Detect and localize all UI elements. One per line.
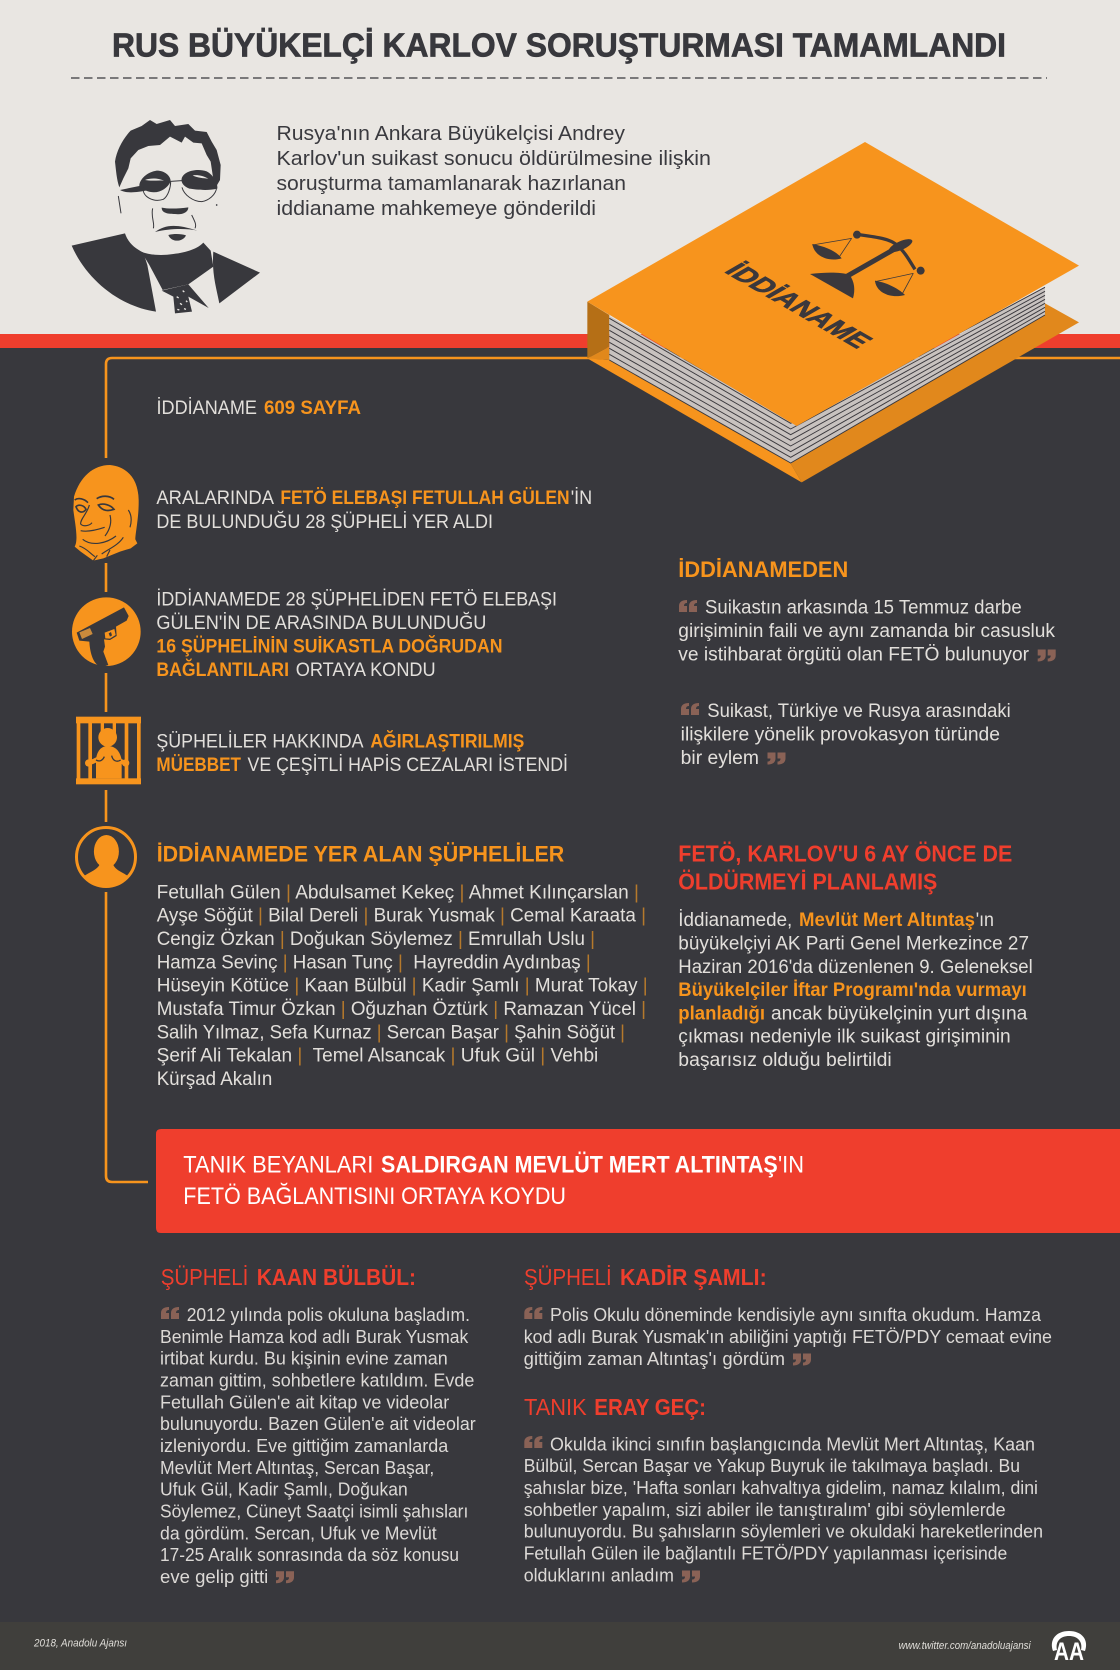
heading: suspect Kadir Şamlı: ŞÜPHELİ — [524, 1264, 612, 1290]
banner: witness statements: SALDIRGAN MEVLÜT MERT ALTINTAŞ — [381, 1152, 778, 1179]
text block: first assassination attempt: çıkması nedeniyle ilk suikast girişiminin — [678, 1027, 1011, 1048]
book cover title: İDDİANAME — [718, 259, 879, 352]
text: 16 suspects directly connected: ORTAYA KONDU — [296, 660, 436, 681]
list of suspects: Kürşad Akalın — [157, 1069, 272, 1090]
quote: Kaan Bülbül statement: zaman gittim, sohbetlere katıldım. Evde — [160, 1370, 474, 1390]
heading: from the indictment: İDDİANAMEDEN — [678, 557, 848, 582]
icon: gun in circle — [72, 597, 141, 667]
list of suspects: Salih Yılmaz, Sefa Kurnaz | Sercan Başar | Şahin Söğüt | — [157, 1022, 625, 1043]
quote: Kadir Şamlı statement: gittiğim zaman Altıntaş'ı gördüm — [524, 1349, 785, 1369]
intro text: Rusya'nın Ankara Büyükelçisi Andrey — [276, 123, 625, 145]
quote: FETÖ behind the assassination — [678, 598, 1056, 665]
heading: suspects in the indictment: İDDİANAMEDE YER ALAN ŞÜPHELİLER — [157, 842, 564, 867]
quote: Kaan Bülbül statement: bulunuyordu. Bazen Gülen'e ait videolar — [160, 1414, 476, 1434]
heading: planned 6 months earlier: ÖLDÜRMEYİ PLANLAMIŞ — [678, 869, 937, 895]
quote: Kadir Şamlı statement — [524, 1305, 1052, 1369]
quote: Kaan Bülbül statement: 2012 yılında polis okuluna başladım. — [187, 1305, 470, 1325]
quote: Eray Geç statement: sohbetler yapalım, sizi abiler ile tanıştıralım' gibi söylemlerde — [524, 1500, 1006, 1520]
text block: first assassination attempt: başarısız olduğu belirtildi — [678, 1050, 892, 1071]
text block: first assassination attempt: İddianamede, — [678, 910, 792, 931]
intro text: Karlov'un suikast sonucu öldürülmesine ilişkin — [276, 148, 711, 170]
quote: FETÖ behind the assassination: ve istihbarat örgütü olan FETÖ bulunuyor — [678, 644, 1030, 665]
text: Gülen among suspects: ARALARINDA — [156, 488, 274, 509]
quote: Kaan Bülbül statement: Benimle Hamza kod adlı Burak Yusmak — [160, 1327, 469, 1347]
intro text: iddianame mahkemeye gönderildi — [276, 198, 596, 220]
heading: witness Eray Geç — [524, 1394, 706, 1420]
text block: first assassination attempt: planladığı — [678, 1004, 765, 1024]
quote: Eray Geç statement: Fetullah Gülen ile bağlantılı FETÖ/PDY yapılanması içerisinde — [524, 1544, 1007, 1564]
text: 16 suspects directly connected — [156, 590, 557, 681]
quote: Eray Geç statement: Okulda ikinci sınıfın başlangıcında Mevlüt Mert Altıntaş, Kaan — [550, 1434, 1035, 1454]
book illustration: İDDİANAME — [587, 142, 1079, 482]
quote: Eray Geç statement — [524, 1434, 1043, 1585]
text: requested sentences: AĞIRLAŞTIRILMIŞ — [370, 730, 524, 752]
logo: AA — [1052, 1631, 1086, 1666]
icon: person silhouette — [76, 828, 136, 887]
heading: planned 6 months earlier — [678, 841, 1012, 895]
heading: suspect Kadir Şamlı — [524, 1264, 767, 1290]
quote: provocation: bir eylem — [681, 748, 759, 769]
quote: Kaan Bülbül statement — [160, 1305, 476, 1587]
quote: provocation: Suikast, Türkiye ve Rusya arasındaki — [707, 701, 1011, 722]
text: 16 suspects directly connected: GÜLEN'İN DE ARASINDA BULUNDUĞU — [156, 612, 486, 634]
timeline connector line — [106, 358, 1120, 1182]
quote: provocation — [681, 701, 1011, 769]
heading: witness Eray Geç: TANIK — [524, 1394, 587, 1420]
quote: Eray Geç statement: bulunuyordu. Bu şahısların söylemleri ve okuldaki hareketlerinden — [524, 1522, 1043, 1542]
text block: first assassination attempt: Mevlüt Mert Altıntaş — [799, 910, 975, 931]
text: 16 suspects directly connected: BAĞLANTILARI — [156, 659, 289, 681]
text block: first assassination attempt: büyükelçiyi AK Parti Genel Merkezince 27 — [678, 934, 1029, 955]
quote: Kadir Şamlı statement: Polis Okulu döneminde kendisiyle aynı sınıfta okudum. Hamza — [550, 1305, 1042, 1325]
quote: Kaan Bülbül statement: Mevlüt Mert Altıntaş, Sercan Başar, — [160, 1458, 434, 1478]
text: page count: İDDİANAME — [156, 398, 257, 419]
text: requested sentences: VE ÇEŞİTLİ HAPİS CEZALARI İSTENDİ — [248, 755, 568, 776]
text: Gülen among suspects: FETÖ ELEBAŞI FETULLAH GÜLEN — [280, 488, 570, 509]
heading: suspect Kaan Bülbül — [161, 1264, 416, 1290]
intro text — [276, 123, 711, 220]
title: RUS BÜYÜKELÇİ KARLOV SORUŞTURMASI TAMAMLANDI — [112, 28, 1006, 64]
list of suspects: Mustafa Timur Özkan | Oğuzhan Öztürk | Ramazan Yücel | — [157, 999, 646, 1020]
text: 16 suspects directly connected: İDDİANAMEDE 28 ŞÜPHELİDEN FETÖ ELEBAŞI — [156, 590, 557, 611]
text block: first assassination attempt — [678, 910, 1033, 1071]
list of suspects: Ayşe Söğüt | Bilal Dereli | Burak Yusmak | Cemal Karaata | — [157, 906, 646, 927]
list of suspects: Hüseyin Kötüce | Kaan Bülbül | Kadir Şamlı | Murat Tokay | — [157, 976, 648, 997]
quote: Kaan Bülbül statement: Fetullah Gülen'e ait kitap ve videolar — [160, 1392, 449, 1412]
text: requested sentences — [156, 730, 568, 776]
quote: Kaan Bülbül statement: Ufuk Gül, Kadir Şamlı, Doğukan — [160, 1480, 408, 1500]
text: Gülen among suspects: DE BULUNDUĞU 28 ŞÜPHELİ YER ALDI — [156, 511, 493, 533]
heading: suspect Kadir Şamlı: KADİR ŞAMLI: — [620, 1264, 767, 1290]
quote: Eray Geç statement: şahıslar bize, 'Hafta sonları kahvaltıya gidelim, namaz kılalım, dini — [524, 1478, 1038, 1498]
footer link: www.twitter.com/anadoluajansi — [899, 1640, 1031, 1652]
icon: Fetullah Gülen face — [73, 465, 139, 561]
text: requested sentences: MÜEBBET — [156, 755, 241, 776]
list of suspects — [157, 882, 648, 1090]
quote: Kaan Bülbül statement: izleniyordu. Eve gittiğim zamanlarda — [160, 1436, 449, 1456]
quote: Kaan Bülbül statement: eve gelip gitti — [160, 1567, 268, 1587]
icon: scales of justice — [810, 231, 925, 298]
heading: witness Eray Geç: ERAY GEÇ: — [594, 1394, 706, 1420]
text block: first assassination attempt: Haziran 2016'da düzenlenen 9. Geleneksel — [678, 957, 1033, 978]
intro text: soruşturma tamamlanarak hazırlanan — [276, 173, 626, 195]
list of suspects: Şerif Ali Tekalan | Temel Alsancak | Ufuk Gül | Vehbi — [157, 1046, 598, 1067]
quote: provocation: ilişkilere yönelik provokasyon türünde — [681, 725, 1000, 746]
text: 16 suspects directly connected: 16 ŞÜPHELİNİN SUİKASTLA DOĞRUDAN — [156, 636, 502, 658]
quote: FETÖ behind the assassination: Suikastın arkasında 15 Temmuz darbe — [705, 598, 1022, 619]
quote: Kaan Bülbül statement: 17-25 Aralık sonrasında da söz konusu — [160, 1545, 459, 1565]
banner: witness statements — [156, 1129, 1120, 1233]
heading: suspect Kaan Bülbül: ŞÜPHELİ — [161, 1264, 248, 1290]
logo: AA: AA — [1054, 1638, 1084, 1666]
text block: first assassination attempt: Büyükelçiler İftar Programı'nda vurmayı — [678, 980, 1027, 1001]
banner: witness statements: 'IN — [778, 1152, 804, 1179]
text: Gülen among suspects: 'İN — [571, 488, 592, 509]
text: page count — [156, 398, 361, 419]
quote: Eray Geç statement: olduklarını anladım — [524, 1565, 674, 1585]
quote: FETÖ behind the assassination: girişiminin faili ve aynı zamanda bir casusluk — [678, 621, 1055, 642]
text block: first assassination attempt: 'ın — [976, 910, 994, 931]
heading: suspect Kaan Bülbül: KAAN BÜLBÜL: — [257, 1264, 416, 1290]
footer credit: 2018, Anadolu Ajansı — [33, 1638, 127, 1650]
text: requested sentences: ŞÜPHELİLER HAKKINDA — [156, 731, 364, 752]
quote: Eray Geç statement: Bülbül, Sercan Başar ve Yakup Buyruk ile takılmaya başladı. Bu — [524, 1456, 1020, 1476]
banner: witness statements: FETÖ BAĞLANTISINI ORTAYA KOYDU — [183, 1183, 566, 1210]
text block: first assassination attempt: ancak büyükelçinin yurt dışına — [771, 1004, 1028, 1024]
heading: planned 6 months earlier: FETÖ, KARLOV'U 6 AY ÖNCE DE — [678, 841, 1012, 867]
quote: Kadir Şamlı statement: kod adlı Burak Yusmak'ın abiliğini yaptığı FETÖ/PDY cemaat evine — [524, 1327, 1052, 1347]
quote: Kaan Bülbül statement: Söylemez, Cüneyt Saatçi isimli şahısları — [160, 1502, 468, 1522]
portrait: Andrey Karlov — [72, 120, 260, 313]
text: Gülen among suspects — [156, 488, 592, 533]
list of suspects: Hamza Sevinç | Hasan Tunç | Hayreddin Aydınbaş | — [157, 952, 591, 973]
banner: witness statements: TANIK BEYANLARI — [183, 1152, 373, 1179]
list of suspects: Cengiz Özkan | Doğukan Söylemez | Emrullah Uslu | — [157, 929, 595, 950]
text: page count: 609 SAYFA — [264, 398, 361, 419]
icon: prisoner behind bars — [76, 717, 141, 784]
quote: Kaan Bülbül statement: da gördüm. Sercan, Ufuk ve Mevlüt — [160, 1523, 437, 1543]
list of suspects: Fetullah Gülen | Abdulsamet Kekeç | Ahmet Kılınçarslan | — [157, 882, 639, 903]
quote: Kaan Bülbül statement: irtibat kurdu. Bu kişinin evine zaman — [160, 1349, 448, 1369]
